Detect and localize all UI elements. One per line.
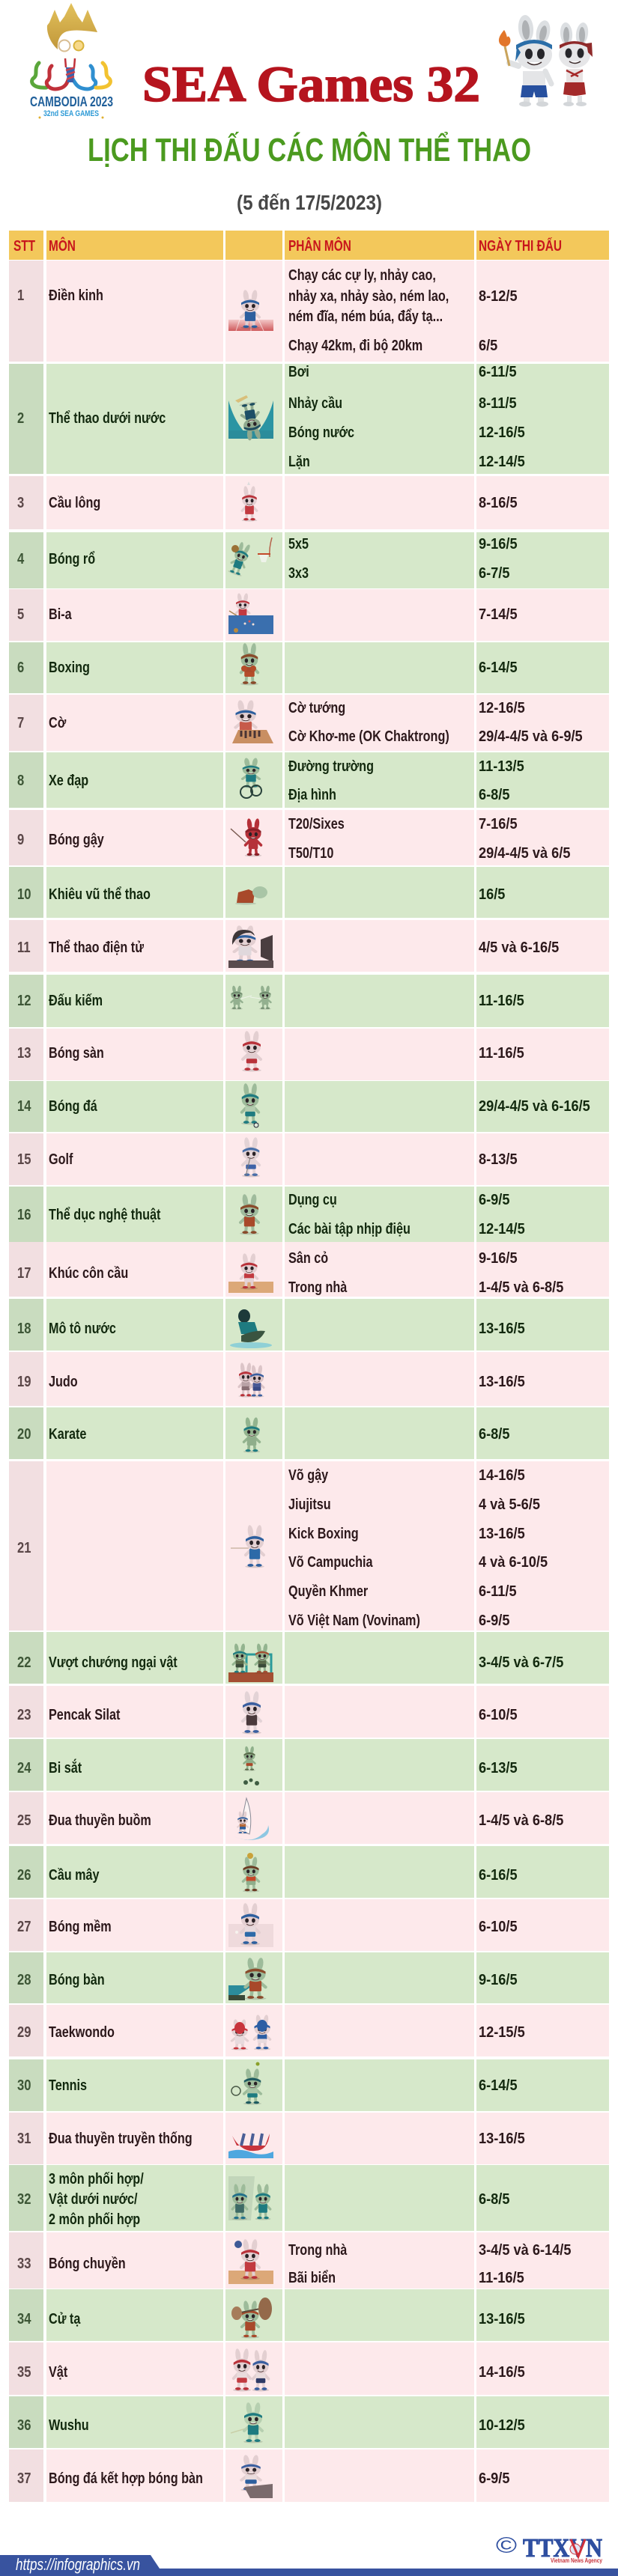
row 7	[9, 695, 609, 751]
icon: dancesport	[235, 886, 267, 904]
discipline: Jiujitsu	[288, 1496, 331, 1513]
date: 1-4/5 và 6-8/5	[479, 1812, 563, 1829]
logo: TTXVN: TTXVN	[523, 2533, 602, 2563]
sport: Bóng đá kết hợp bóng bàn	[49, 2470, 203, 2487]
row 19	[9, 1352, 609, 1406]
column: STT: STT	[13, 238, 35, 255]
discipline: Bãi biển	[288, 2270, 336, 2286]
number: 22	[17, 1654, 31, 1671]
sport: Bóng mềm	[49, 1919, 112, 1935]
icon: cricket	[231, 818, 262, 856]
title: SEA Games 32: SEA Games 32	[142, 55, 480, 112]
icon: jet ski	[230, 1309, 272, 1348]
number: 26	[17, 1867, 31, 1884]
number: 18	[17, 1321, 31, 1337]
row 2	[9, 364, 609, 474]
icon: fencing	[230, 985, 272, 1010]
row 13	[9, 1029, 609, 1080]
sport: Wushu	[49, 2417, 89, 2434]
date: 8-12/5	[479, 288, 518, 305]
date: 9-16/5	[479, 536, 518, 552]
icon: karate	[243, 1417, 261, 1452]
row 28	[9, 1952, 609, 2003]
sport: Bi sắt	[49, 1760, 82, 1776]
date: 12-14/5	[479, 454, 525, 470]
number: 10	[17, 886, 31, 903]
number: 30	[17, 2077, 31, 2094]
discipline: Cờ tướng	[288, 700, 345, 716]
date: 13-16/5	[479, 2311, 525, 2327]
date: 6-8/5	[479, 1426, 509, 1443]
date: 12-15/5	[479, 2024, 525, 2041]
date: 13-16/5	[479, 1374, 525, 1390]
date: 11-16/5	[479, 1045, 524, 1062]
number: 2	[17, 410, 24, 427]
row 11	[9, 920, 609, 972]
row 32	[9, 2165, 609, 2231]
date: 6-11/5	[479, 364, 517, 380]
row 24	[9, 1739, 609, 1791]
date: 13-16/5	[479, 1526, 525, 1542]
sport: Khúc côn cầu	[49, 1265, 128, 1282]
discipline: Võ gậy	[288, 1467, 328, 1484]
subheading: dates: (5 đến 17/5/2023)	[237, 191, 382, 214]
icon: tennis	[231, 2062, 262, 2105]
source url: https://infographics.vn	[16, 2555, 140, 2574]
icon: cycling	[240, 758, 262, 799]
date: 3-4/5 và 6-7/5	[479, 1654, 563, 1671]
date: 10-12/5	[479, 2417, 525, 2434]
row 14	[9, 1081, 609, 1132]
sport: Bóng sàn	[49, 1045, 104, 1062]
number: 9	[17, 832, 24, 848]
date: 16/5	[479, 886, 505, 903]
row 18	[9, 1299, 609, 1351]
number: 20	[17, 1426, 31, 1443]
icon: golf	[241, 1137, 261, 1177]
discipline: Địa hình	[288, 787, 336, 803]
number: 6	[17, 660, 24, 676]
sport line: 3 môn phối hợp/	[49, 2171, 144, 2187]
icon: billiards	[228, 593, 273, 634]
number: 33	[17, 2256, 31, 2272]
date: 8-13/5	[479, 1151, 518, 1168]
row 15	[9, 1133, 609, 1185]
number: 5	[17, 606, 24, 623]
sport: Cử tạ	[49, 2311, 80, 2327]
date: 6-10/5	[479, 1707, 518, 1723]
discipline: ném đĩa, ném búa, đẩy tạ...	[288, 308, 443, 325]
icon: wrestling	[232, 2348, 270, 2391]
date: 8-11/5	[479, 395, 517, 412]
logo: Cambodia 2023: 32nd SEA GAMES	[43, 109, 99, 118]
discipline: Lặn	[288, 454, 310, 470]
discipline: Trong nhà	[288, 2242, 347, 2259]
discipline: Dụng cụ	[288, 1192, 337, 1208]
discipline: Kick Boxing	[288, 1526, 359, 1542]
discipline: Cờ Khơ-me (OK Chaktrong)	[288, 728, 449, 745]
sport: Pencak Silat	[49, 1707, 120, 1723]
date: 6-9/5	[479, 1192, 509, 1208]
sport: Điền kinh	[49, 287, 103, 304]
number: 15	[17, 1151, 31, 1168]
sport: Đua thuyền truyền thống	[49, 2131, 193, 2147]
sport: Boxing	[49, 660, 90, 676]
discipline: Quyền Khmer	[288, 1583, 368, 1600]
discipline: 3x3	[288, 565, 309, 582]
row 9	[9, 810, 609, 865]
icon: basketball	[228, 538, 273, 576]
date: 13-16/5	[479, 2131, 525, 2147]
icon: gymnastics	[239, 1194, 260, 1235]
number: 27	[17, 1919, 31, 1935]
number: 35	[17, 2364, 31, 2381]
icon: weightlifting	[231, 2298, 272, 2339]
icon: hockey	[228, 1253, 273, 1293]
icon: taekwondo	[231, 2015, 271, 2050]
row 35	[9, 2342, 609, 2395]
number: 8	[17, 773, 24, 789]
date: 6-10/5	[479, 1919, 518, 1935]
number: 11	[17, 940, 31, 956]
discipline: Nhảy cầu	[288, 395, 342, 412]
discipline: Đường trường	[288, 758, 374, 775]
row 34	[9, 2289, 609, 2341]
number: 23	[17, 1707, 31, 1723]
discipline: Sân cỏ	[288, 1250, 328, 1267]
discipline: Bơi	[288, 364, 309, 380]
number: 13	[17, 1045, 31, 1062]
number: 4	[17, 551, 24, 567]
number: 31	[17, 2131, 31, 2147]
date: 4 và 5-6/5	[479, 1496, 540, 1513]
date: 6/5	[479, 338, 497, 354]
discipline: Bóng nước	[288, 424, 354, 441]
sport: Mô tô nước	[49, 1321, 116, 1337]
row 30	[9, 2059, 609, 2111]
sport: Thể dục nghệ thuật	[49, 1207, 160, 1223]
number: 17	[17, 1265, 31, 1282]
date: 6-14/5	[479, 660, 518, 676]
row 16	[9, 1187, 609, 1242]
icon: floorball	[241, 1031, 262, 1072]
row 37	[9, 2449, 609, 2502]
date: 29/4-4/5 và 6/5	[479, 845, 570, 862]
sport: Khiêu vũ thể thao	[49, 886, 151, 903]
row 20	[9, 1407, 609, 1459]
date: 6-13/5	[479, 1760, 518, 1776]
number: 28	[17, 1972, 31, 1988]
sport: Golf	[49, 1151, 73, 1168]
number: 1	[17, 287, 24, 304]
icon: diver	[228, 395, 273, 440]
number: 16	[17, 1207, 31, 1223]
number: 14	[17, 1098, 31, 1115]
icon: pencak silat	[241, 1691, 262, 1734]
date: 6-9/5	[479, 1613, 509, 1629]
date: 4/5 và 6-16/5	[479, 940, 559, 956]
date: 3-4/5 và 6-14/5	[479, 2242, 571, 2259]
icon: badminton	[241, 482, 258, 521]
sport: Tennis	[49, 2077, 87, 2094]
header block	[30, 3, 593, 214]
footer band	[0, 2555, 618, 2576]
number: 34	[17, 2311, 31, 2327]
logo: TTXVN: ©	[496, 2533, 517, 2558]
date: 7-16/5	[479, 816, 518, 832]
date: 6-7/5	[479, 565, 509, 582]
number: 25	[17, 1812, 31, 1829]
sport: Vượt chướng ngại vật	[49, 1654, 178, 1671]
row 1	[9, 261, 609, 362]
number: 7	[17, 715, 24, 731]
date: 6-8/5	[479, 2191, 509, 2208]
row 10	[9, 867, 609, 918]
column: Môn: MÔN	[49, 238, 76, 255]
row 25	[9, 1792, 609, 1844]
sport: Bi-a	[49, 606, 72, 623]
row 27	[9, 1899, 609, 1951]
icon: table tennis	[228, 1958, 267, 2000]
icon: chess	[232, 701, 273, 743]
sport: Thể thao điện tử	[49, 940, 144, 956]
column: Ngày thi đấu: NGÀY THI ĐẤU	[479, 238, 562, 255]
sport: Cờ	[49, 715, 66, 731]
sport: Bóng đá	[49, 1098, 97, 1115]
row 33	[9, 2232, 609, 2289]
icon: volleyball	[228, 2239, 273, 2284]
number: 21	[17, 1540, 31, 1556]
number: 29	[17, 2024, 31, 2041]
sport: Karate	[49, 1426, 86, 1443]
icon: football	[240, 1083, 261, 1127]
date: 6-11/5	[479, 1583, 517, 1600]
number: 24	[17, 1760, 31, 1776]
number: 36	[17, 2417, 31, 2434]
sport line: Vật dưới nước/	[49, 2191, 138, 2208]
number: 3	[17, 495, 24, 511]
date: 12-16/5	[479, 424, 525, 441]
row 36	[9, 2396, 609, 2448]
icon: petanque	[243, 1746, 259, 1785]
row 29	[9, 2005, 609, 2056]
sport line: 2 môn phối hợp	[49, 2211, 140, 2228]
discipline: Trong nhà	[288, 1279, 347, 1296]
icon: judo	[238, 1362, 265, 1397]
logo: Cambodia 2023: CAMBODIA 2023	[30, 94, 113, 109]
sport: Vật	[49, 2364, 67, 2381]
discipline: T20/Sixes	[288, 816, 345, 832]
sport: Xe đạp	[49, 773, 88, 789]
date: 1-4/5 và 6-8/5	[479, 1279, 563, 1296]
sport: Bóng bàn	[49, 1972, 105, 1988]
sport: Cầu mây	[49, 1867, 100, 1884]
icon: esports	[228, 925, 273, 968]
sport: Bóng gậy	[49, 832, 104, 848]
row 26	[9, 1846, 609, 1898]
number: 32	[17, 2191, 31, 2208]
discipline: 5x5	[288, 536, 309, 552]
date: 6-9/5	[479, 2470, 509, 2487]
icon: boxing	[240, 643, 259, 686]
date: 12-14/5	[479, 1221, 525, 1237]
sport: Judo	[49, 1374, 78, 1390]
icon: sepak takraw	[241, 1853, 261, 1893]
icon: triathlon	[228, 2176, 271, 2220]
row 22	[9, 1632, 609, 1684]
row 8	[9, 752, 609, 808]
date: 29/4-4/5 và 6-9/5	[479, 728, 583, 745]
discipline: nhảy xa, nhảy sào, ném lao,	[288, 288, 449, 305]
date: 29/4-4/5 và 6-16/5	[479, 1098, 590, 1115]
date: 13-16/5	[479, 1321, 525, 1337]
icon: runner	[228, 290, 273, 331]
date: 11-16/5	[479, 2270, 524, 2286]
row 17	[9, 1242, 609, 1297]
mascots: two rabbits	[499, 14, 593, 106]
logo: TTXVN	[496, 2533, 602, 2564]
date: 14-16/5	[479, 1467, 525, 1484]
column: Phân môn: PHÂN MÔN	[288, 238, 351, 255]
date: 11-16/5	[479, 993, 524, 1009]
sport: Taekwondo	[49, 2024, 115, 2041]
row 6	[9, 642, 609, 693]
discipline: Chạy 42km, đi bộ 20km	[288, 338, 422, 354]
icon: teqball	[240, 2455, 273, 2498]
number: 37	[17, 2470, 31, 2487]
discipline: T50/T10	[288, 845, 333, 862]
row 4	[9, 532, 609, 588]
discipline: Chạy các cự ly, nhảy cao,	[288, 267, 436, 284]
date: 6-8/5	[479, 787, 509, 803]
sport: Thể thao dưới nước	[49, 410, 166, 427]
table header	[9, 231, 609, 260]
sport: Đua thuyền buồm	[49, 1812, 151, 1829]
sport: Bóng rổ	[49, 551, 95, 567]
icon: softball	[228, 1903, 273, 1947]
date: 8-16/5	[479, 495, 518, 511]
sport: Đấu kiếm	[49, 993, 103, 1009]
date: 12-16/5	[479, 700, 525, 716]
date: 6-14/5	[479, 2077, 518, 2094]
date: 9-16/5	[479, 1972, 518, 1988]
logo: Cambodia 2023	[30, 3, 113, 118]
row 21	[9, 1461, 609, 1630]
sport: Cầu lông	[49, 495, 100, 511]
row 23	[9, 1686, 609, 1738]
date: 6-16/5	[479, 1867, 518, 1884]
icon: obstacle race	[228, 1644, 273, 1682]
date: 11-13/5	[479, 758, 524, 775]
logo: TTXVN: Vietnam News Agency	[551, 2557, 602, 2564]
discipline: Võ Việt Nam (Vovinam)	[288, 1613, 420, 1629]
date: 7-14/5	[479, 606, 518, 623]
icon: martial arts	[231, 1525, 265, 1568]
discipline: Võ Campuchia	[288, 1554, 373, 1571]
date: 9-16/5	[479, 1250, 518, 1267]
date: 14-16/5	[479, 2364, 525, 2381]
row 5	[9, 589, 609, 641]
sport: Bóng chuyền	[49, 2256, 126, 2272]
date: 4 và 6-10/5	[479, 1554, 548, 1571]
number: 19	[17, 1374, 31, 1390]
row 3	[9, 476, 609, 529]
discipline: Các bài tập nhịp điệu	[288, 1221, 411, 1237]
footer	[0, 2533, 618, 2576]
row 31	[9, 2113, 609, 2164]
icon: dragon boat	[228, 2134, 273, 2158]
icon: sailing	[237, 1797, 269, 1840]
icon: wushu	[231, 2402, 264, 2443]
number: 12	[17, 993, 31, 1009]
row 12	[9, 975, 609, 1027]
